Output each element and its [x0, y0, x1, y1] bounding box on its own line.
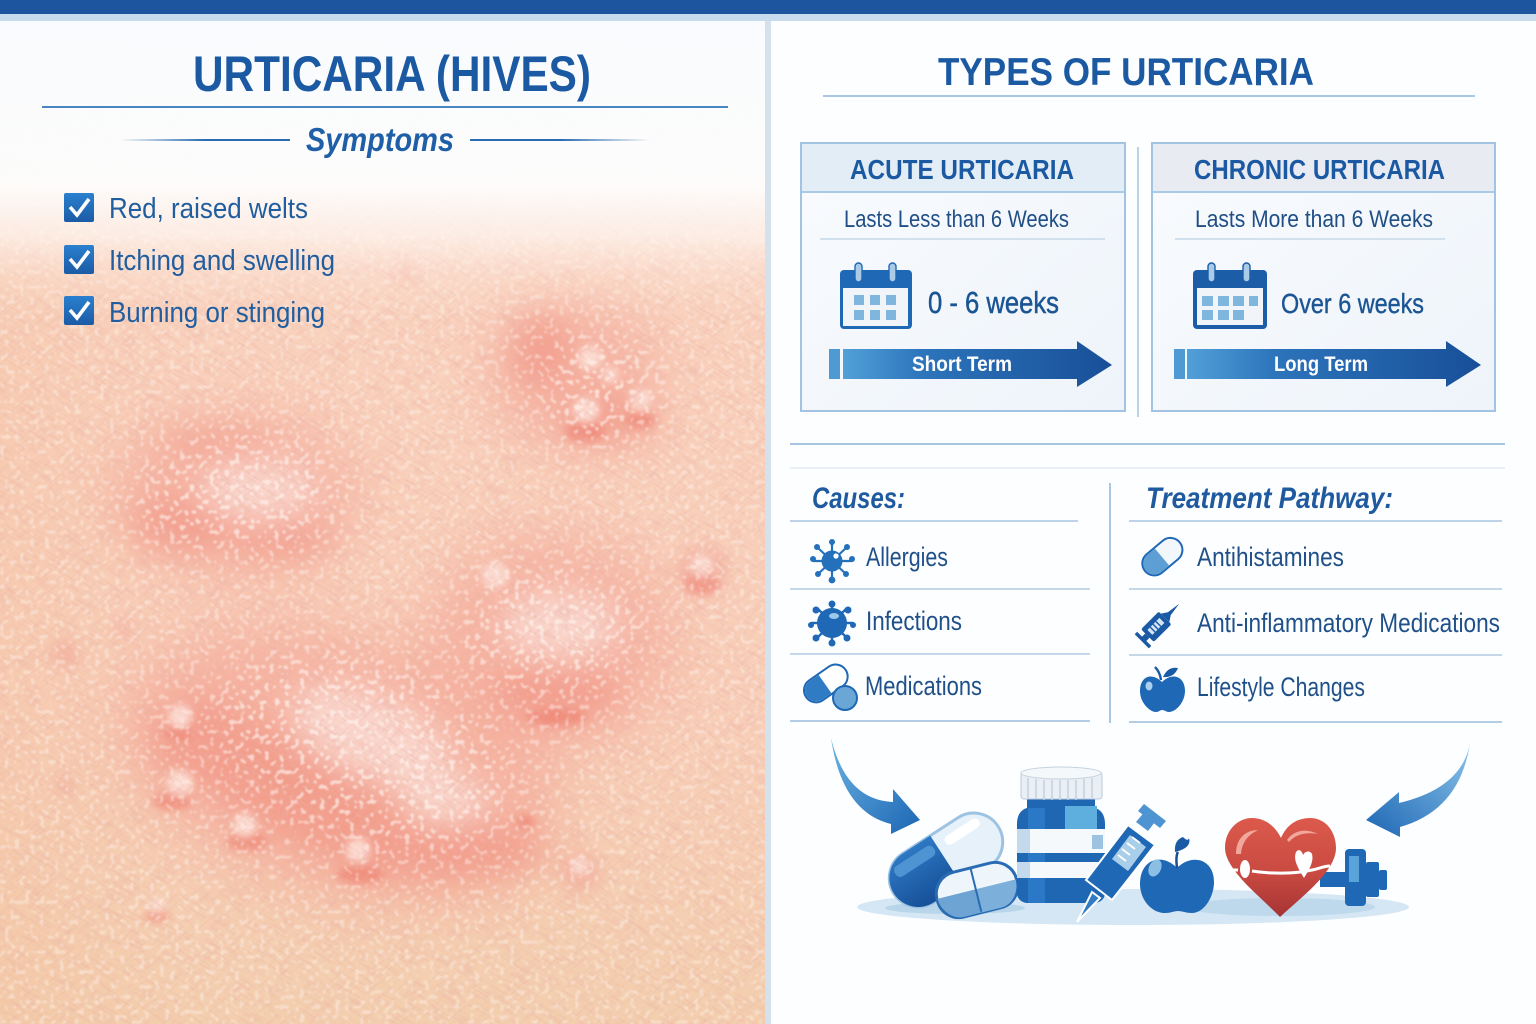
- icon: syringe: [1135, 597, 1186, 648]
- icon: apple: [1140, 667, 1185, 712]
- cause: allergies: [810, 539, 948, 583]
- platform shadow: [857, 889, 1409, 925]
- icon: pill: [1137, 533, 1187, 580]
- duration text: Lasts Less than 6 Weeks: [844, 206, 1069, 233]
- cause: medications: [799, 660, 982, 710]
- icon: virus: [808, 600, 856, 646]
- card: acute urticaria: [801, 143, 1125, 411]
- pale speckles: [0, 230, 765, 1024]
- skin texture: [0, 286, 765, 1024]
- item: red raised welts: Red, raised welts: [109, 193, 308, 225]
- small welts: [51, 263, 726, 922]
- panel: skin photo with symptoms: [0, 192, 765, 1024]
- symptoms checklist: [64, 193, 335, 329]
- causes heading: Causes:: [812, 482, 905, 515]
- right title rule: [823, 95, 1475, 97]
- left title: URTICARIA (HIVES): [193, 46, 591, 102]
- icon: syringe: [1077, 804, 1166, 922]
- right title: TYPES OF URTICARIA: [938, 51, 1314, 94]
- arrow: long term: Long Term: [1274, 353, 1368, 376]
- illustration: treatment group: [857, 767, 1409, 925]
- cause: infections: [808, 600, 962, 646]
- cause: medications: Medications: [865, 671, 982, 701]
- treatment: lifestyle changes: Lifestyle Changes: [1197, 672, 1365, 702]
- icon: calendar: [840, 263, 912, 329]
- card heading: ACUTE URTICARIA: [850, 154, 1074, 185]
- icon: heart with heartbeat: [1225, 818, 1336, 917]
- treatment: antihistamines: Antihistamines: [1197, 542, 1344, 572]
- arrow: curved right: [1366, 743, 1470, 837]
- title rule: [42, 106, 728, 108]
- panel: causes: [790, 482, 1090, 722]
- icon: calendar: [1193, 263, 1267, 329]
- icon: allergen: [810, 539, 855, 583]
- top white fade: [0, 21, 765, 294]
- icon: dumbbell: [1320, 849, 1387, 906]
- icon: apple: [1140, 837, 1214, 913]
- subtitle: symptoms: Symptoms: [306, 121, 454, 158]
- treatment: lifestyle changes: [1140, 667, 1365, 712]
- cause: allergies: Allergies: [866, 542, 948, 572]
- icon: medicine bottle: [1017, 767, 1105, 903]
- item: itching and swelling: Itching and swelling: [109, 245, 335, 277]
- skin redness patches: [88, 300, 675, 952]
- section rules: [790, 443, 1505, 723]
- duration value: Over 6 weeks: [1281, 288, 1424, 319]
- treatment heading: Treatment Pathway:: [1146, 482, 1393, 515]
- item: burning or stinging: Burning or stinging: [109, 297, 325, 329]
- duration text: Lasts More than 6 Weeks: [1195, 206, 1433, 233]
- arrow: short term: [829, 341, 1112, 387]
- card divider: [1137, 147, 1139, 417]
- raised bump speckles: [142, 337, 645, 848]
- icon: large capsule: [878, 802, 1014, 918]
- panel: treatment pathway: [1129, 482, 1502, 723]
- arrow: short term: Short Term: [912, 353, 1012, 376]
- icon: small capsule: [932, 858, 1022, 922]
- card: chronic urticaria: [1152, 143, 1495, 411]
- duration value: 0 - 6 weeks: [928, 285, 1059, 320]
- panel divider: [765, 21, 771, 1024]
- card heading: CHRONIC URTICARIA: [1194, 154, 1445, 185]
- arrow: curved left: [831, 738, 920, 834]
- arrow: long term: [1174, 341, 1481, 387]
- cause: infections: Infections: [866, 606, 962, 636]
- treatment: antihistamines: [1137, 533, 1344, 580]
- treatment: anti-inflammatory medications: [1135, 597, 1500, 648]
- icon: capsule and tablet: [799, 660, 857, 710]
- top banner: [0, 0, 1536, 21]
